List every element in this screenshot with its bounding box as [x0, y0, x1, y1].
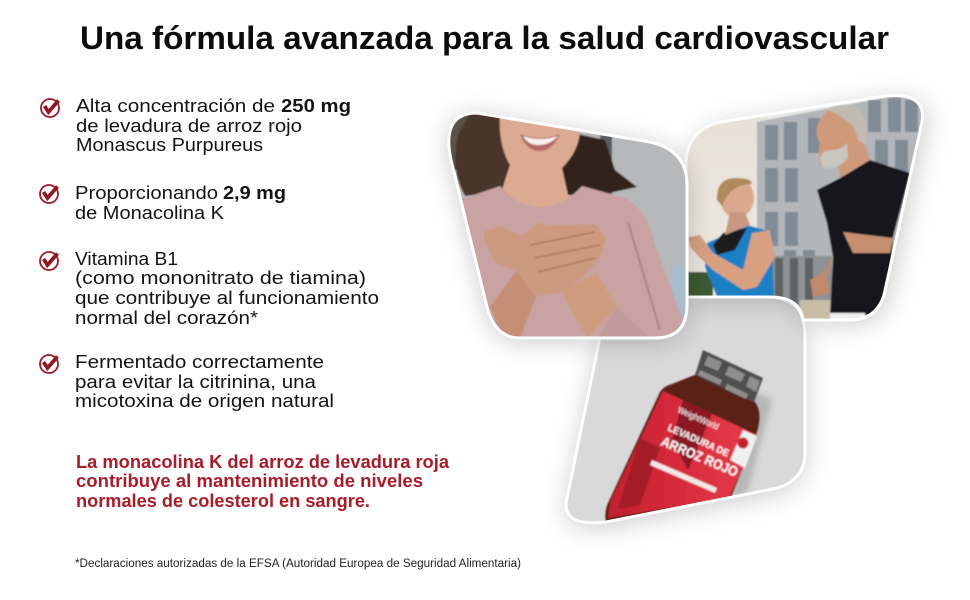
bottle	[605, 350, 772, 522]
benefit 1 text: Monascus Purpureus	[76, 135, 263, 155]
benefit 3	[40, 249, 379, 328]
footnote: *Declaraciones autorizadas de la EFSA (Autoridad Europea de Seguridad Alimentaria)	[75, 558, 521, 570]
hair	[455, 113, 512, 196]
benefit 2 text: de Monacolina K	[75, 203, 224, 223]
benefit 1	[41, 96, 351, 155]
arms	[490, 270, 538, 338]
panel: couple running	[680, 90, 927, 330]
panel: woman hands on heart	[440, 105, 690, 345]
icon: check mark 2	[40, 185, 58, 203]
panel: product bottle	[566, 297, 805, 528]
benefit 4 text	[75, 352, 334, 411]
man runner	[817, 160, 910, 315]
bottle: WeightWorld	[676, 405, 720, 432]
benefit 2 text: Proporcionando	[75, 183, 218, 203]
bottle: ARROZ ROJO	[659, 433, 741, 480]
benefit list	[40, 96, 379, 411]
icon: check mark 1	[41, 99, 59, 117]
benefit 4	[40, 352, 334, 411]
benefit 1 text: 250 mg	[281, 96, 351, 116]
hands	[484, 222, 606, 296]
bottle: LEVADURA DE	[666, 423, 731, 460]
benefit 4 text: Fermentado correctamente	[75, 352, 324, 372]
benefit 1 text: Alta concentración de	[76, 96, 275, 116]
benefit 3 text: Vitamina B1	[75, 249, 178, 269]
sweater	[462, 186, 682, 340]
benefit 1 text: de levadura de arroz rojo	[76, 116, 302, 136]
benefit 3 text: normal del corazón*	[75, 308, 258, 328]
benefit 2 text	[75, 183, 286, 223]
title: Una fórmula avanzada para la salud cardiovascular	[80, 20, 889, 56]
icon: check mark 3	[40, 252, 58, 270]
face and neck	[500, 113, 582, 208]
benefit 3 text: (como mononitrato de tiamina)	[75, 268, 366, 288]
benefit 4 text: para evitar la citrinina, una	[75, 372, 317, 392]
red statement: contribuye al mantenimiento de niveles	[76, 471, 423, 491]
benefit 2	[40, 183, 286, 223]
icon: check mark 4	[40, 355, 58, 373]
benefit 1 text	[76, 96, 351, 155]
red statement: normales de colesterol en sangre.	[76, 491, 370, 511]
benefit 4 text: micotoxina de origen natural	[75, 391, 334, 411]
red statement	[76, 452, 450, 511]
benefit 2 text: 2,9 mg	[223, 183, 286, 203]
benefit 3 text: que contribuye al funcionamiento	[75, 288, 379, 308]
woman runner	[705, 225, 774, 297]
red statement: La monacolina K del arroz de levadura roja	[76, 452, 450, 472]
benefit 3 text	[75, 249, 379, 328]
